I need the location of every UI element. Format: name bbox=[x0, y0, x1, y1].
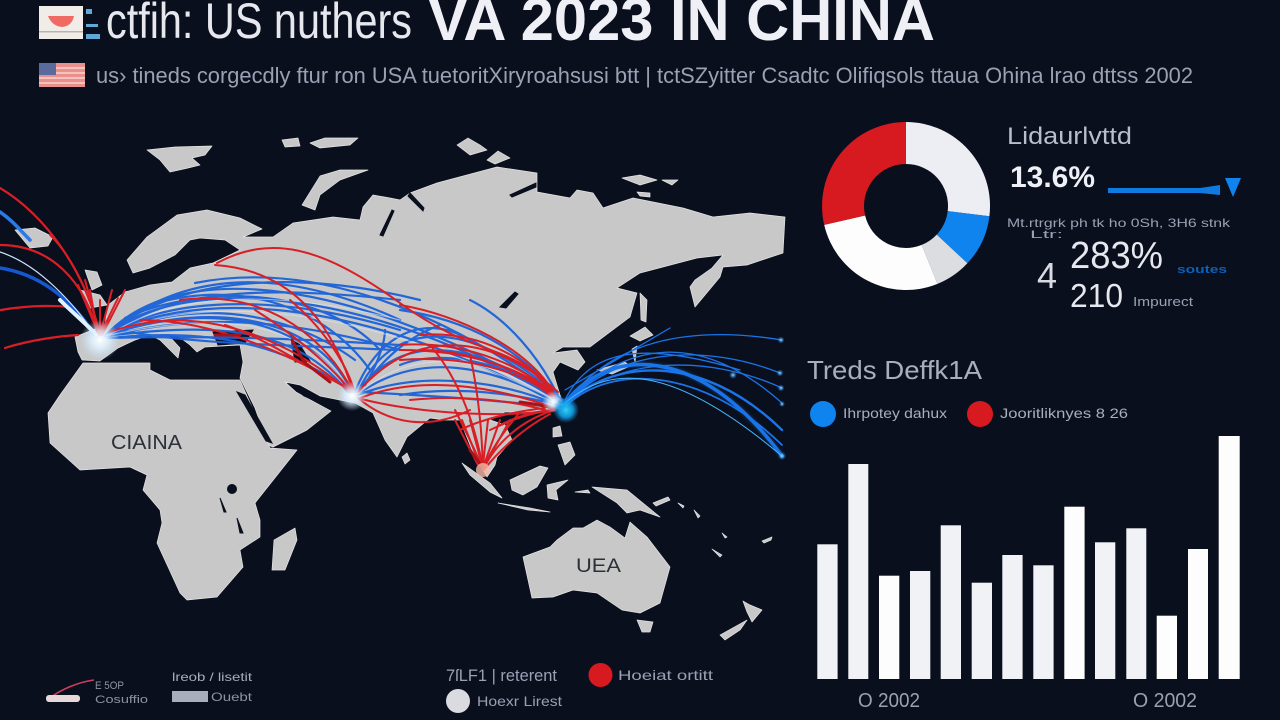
map legend left: Cosuffio bbox=[95, 694, 148, 706]
trend arrow bbox=[1225, 178, 1241, 197]
stats panel bbox=[1007, 123, 1241, 314]
legend: red bbox=[967, 401, 1128, 427]
map legend right bbox=[446, 663, 713, 713]
legend heading: 7ſLF1 | reterent bbox=[446, 666, 557, 685]
stat heading: Lidaurlvttd bbox=[1007, 123, 1132, 150]
legend: red dot bbox=[588, 663, 713, 687]
legend: grey dot bbox=[446, 689, 562, 713]
legend: red: Jooritliknyes 8 26 bbox=[1000, 405, 1128, 421]
bar axis label left: O 2002 bbox=[858, 690, 920, 712]
blue trade arcs bbox=[105, 277, 563, 408]
bar axis label right: O 2002 bbox=[1133, 690, 1197, 712]
stat caption: Mt.rtrgrk ph tk ho 0Sh, 3H6 stnk bbox=[1007, 216, 1231, 230]
world map bbox=[0, 138, 786, 640]
header bbox=[39, 0, 1193, 88]
chart legend bbox=[810, 401, 1128, 427]
western fan of arcs bbox=[0, 188, 125, 348]
legend swatch bbox=[172, 691, 208, 702]
legend text: Ouebt bbox=[211, 690, 253, 704]
icon: subtitle US flag bbox=[39, 63, 85, 87]
pale route overlays bbox=[105, 299, 560, 405]
blue endpoint dots bbox=[729, 336, 786, 460]
map label: UEA: UEA bbox=[576, 556, 621, 577]
blue note: soutes bbox=[1177, 264, 1227, 276]
bar chart bbox=[817, 436, 1240, 679]
import note: Impurect bbox=[1133, 294, 1193, 309]
land: Eurasia bbox=[75, 167, 785, 477]
eastern fan of blue arcs bbox=[565, 328, 782, 456]
subtitle: us› tineds corgecdly ftur ron USA tuetoritXiryroahsusi btt | tctSZyitter Csadtc Olifiqsols ttaua Ohina lrao dttss 2002 bbox=[96, 63, 1193, 88]
trend line bbox=[1108, 185, 1220, 195]
blue glow bbox=[565, 365, 782, 456]
land: islands bbox=[15, 138, 772, 640]
map label: CHINA: CIAINA bbox=[111, 432, 183, 454]
map inland seas bbox=[213, 183, 536, 533]
segment: blue bbox=[937, 211, 989, 263]
segment: red bbox=[822, 122, 906, 225]
donut chart bbox=[822, 122, 990, 290]
red trade arcs bbox=[110, 248, 558, 470]
land: Australia bbox=[523, 520, 670, 613]
icon: title flag bbox=[39, 6, 100, 39]
legend: grey dot: Hoexr Lirest bbox=[477, 693, 562, 709]
map landmasses bbox=[15, 138, 785, 640]
hub glows bbox=[80, 320, 579, 477]
icon: route sample bbox=[46, 680, 94, 702]
land: Africa bbox=[48, 363, 297, 600]
segment: white bbox=[824, 216, 938, 290]
stat number 4: 4 bbox=[1037, 255, 1057, 296]
legend: blue bbox=[810, 401, 947, 427]
trade arcs bbox=[0, 188, 782, 470]
segment: grey bbox=[922, 235, 967, 284]
legend: blue: Ihrpotey dahux bbox=[843, 405, 947, 421]
stat number 283%: 283% bbox=[1070, 235, 1163, 277]
segment: light bbox=[906, 122, 990, 216]
stat value: 13.6% bbox=[1010, 161, 1095, 194]
trade deficit heading: Treds Deffk1A bbox=[807, 355, 983, 385]
map legend left bbox=[46, 670, 253, 706]
legend text: lreob / lisetit bbox=[172, 670, 253, 684]
dark red congestion bbox=[215, 335, 552, 468]
stat caption second line: Ltr: bbox=[1030, 229, 1063, 241]
stat number 210: 210 bbox=[1070, 277, 1123, 314]
legend: red dot: Hoeiat ortitt bbox=[618, 667, 713, 683]
route legend text: E 5OP bbox=[95, 680, 124, 692]
